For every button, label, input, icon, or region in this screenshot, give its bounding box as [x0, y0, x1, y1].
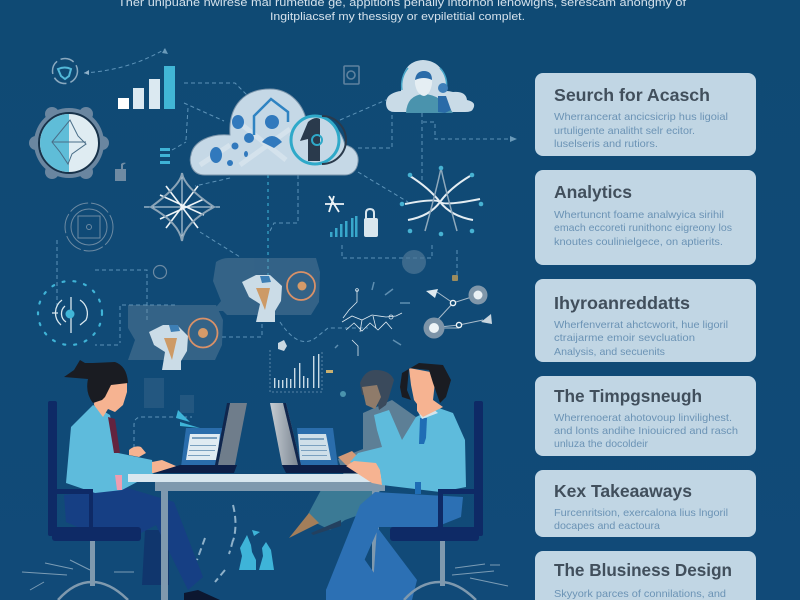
card: The Business Design [535, 551, 756, 600]
card: Search [535, 73, 756, 156]
card: Key Takeaways: docapes and eactoura [554, 520, 660, 532]
woman [64, 360, 220, 600]
icon: gauge gear [29, 107, 109, 179]
card: Analytics: Analytics [554, 182, 632, 202]
card: Key Takeaways: Kex Takeaaways [554, 481, 692, 501]
small decorative marks [144, 250, 458, 582]
small cloud with person [386, 60, 474, 113]
card: Key Takeaways: Furcenritsion, exercalona lius lngoril [554, 507, 728, 519]
card: Analytics: Whertuncnt foame analwyica sirihil [554, 209, 724, 221]
left laptop [154, 403, 247, 473]
main cloud [190, 89, 358, 175]
card: The Timpgsneugh: unluza the docoldeir [554, 438, 649, 450]
card: The Timpgsneugh: The Timpgsneugh [554, 386, 702, 406]
right chair [390, 401, 483, 600]
card: The Timpgsneugh [535, 376, 756, 456]
card: third topic: Wherfenverrat ahctcworit, hue ligoril [554, 319, 728, 331]
third person seated behind [289, 370, 416, 538]
card: Search: Seurch for Acasch [554, 85, 710, 105]
man [326, 363, 466, 600]
left chair [48, 401, 141, 600]
card: third topic [535, 279, 756, 362]
icon: circular schematic [65, 203, 113, 251]
intro text: Ingitpliacsef my thessigy or evpiletitial complet. [270, 11, 525, 23]
bar chart icon [118, 66, 175, 109]
card: third topic: Ihyroanreddatts [554, 293, 690, 313]
right laptop [270, 403, 368, 473]
card: Search: Wherrancerat ancicsicrip hus ligoial [554, 111, 728, 123]
icon: dotted dial [38, 281, 102, 345]
card: third topic: ctraijarme emoir sevcluation [554, 332, 695, 344]
icon: node cluster with triangles [424, 286, 492, 338]
icon: star network right [400, 166, 483, 236]
small bar chart [270, 350, 322, 392]
head icon upper with orange ring [242, 272, 315, 322]
card: The Timpgsneugh: Wherrenoerat ahotovoup linvilighest. [554, 412, 732, 424]
icon: map network [335, 282, 410, 356]
table [128, 474, 412, 600]
card: The Timpgsneugh: and lonts andihe Iniouicred and rasch [554, 425, 738, 437]
card: The Business Design: The Blusiness Design [554, 560, 732, 580]
card: Analytics: knoutes coulinielgece, on aptierits. [554, 236, 723, 248]
card: Search: urtuligente analitht selr ecitor. [554, 125, 695, 137]
decorative chair base rays [22, 560, 508, 590]
card: third topic: Analysis, and secuenits [554, 346, 665, 358]
icon: small lock [115, 163, 126, 181]
intro text [118, 0, 687, 23]
card: Analytics: emach eccoreti runithonc eigreony los [554, 222, 732, 234]
icon: list lines [160, 148, 170, 164]
card: Key Takeaways [535, 470, 756, 537]
card: The Business Design: Skyyork parces of connilations, and [554, 588, 726, 600]
translucent panels [128, 258, 320, 360]
decorative figures under table [239, 530, 274, 570]
icon: document outline [344, 66, 359, 84]
connector lines [57, 48, 517, 455]
icon: ring target [52, 58, 78, 84]
card: Analytics [535, 170, 756, 265]
icon: star network left [144, 173, 220, 241]
head icon lower with orange ring [149, 318, 218, 370]
card: Search: luselseris and rutiors. [554, 138, 658, 150]
icon: asterisk, signal and padlock [325, 196, 378, 237]
